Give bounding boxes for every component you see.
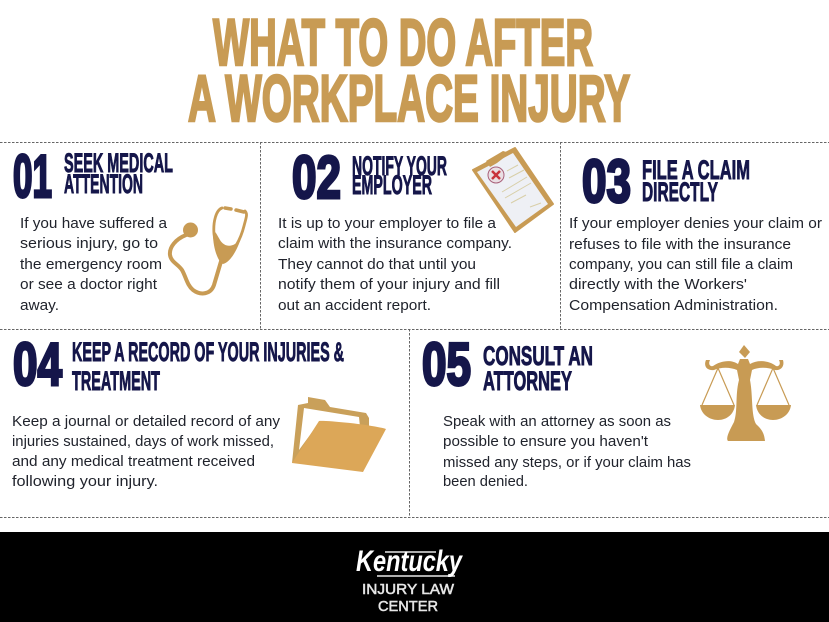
heading: notify your employer: EMPLOYER xyxy=(352,170,432,200)
heading: seek medical attention xyxy=(64,148,173,199)
step number 04: 04 xyxy=(13,331,62,398)
body text: Speak with an attorney as soon as xyxy=(443,413,671,430)
step number 01: 01 xyxy=(13,143,52,210)
icon: clipboard xyxy=(473,148,553,232)
panel: step 2 notify your employer xyxy=(278,144,553,314)
title xyxy=(188,5,630,135)
body text: been denied. xyxy=(443,473,528,490)
body text xyxy=(443,413,691,490)
heading: keep a record of your injuries and treatment xyxy=(72,337,344,396)
body text xyxy=(278,215,512,314)
logo: Kentucky Injury Law Center xyxy=(356,545,463,615)
heading: file a claim directly xyxy=(642,155,750,207)
heading: file a claim directly: FILE A CLAIM xyxy=(642,155,750,185)
body text: Compensation Administration. xyxy=(569,297,778,314)
body text: Keep a journal or detailed record of any xyxy=(12,413,281,430)
panel: step 5 consult an attorney xyxy=(422,331,791,490)
icon: folder xyxy=(292,397,386,472)
body text: out an accident report. xyxy=(278,297,431,314)
heading: keep a record of your injuries and treatment: TREATMENT xyxy=(72,366,160,396)
panel: step 1 seek medical attention xyxy=(13,143,247,314)
body text: directly with the Workers' xyxy=(569,276,747,293)
body text: missed any steps, or if your claim has xyxy=(443,454,691,471)
footer band with logo xyxy=(0,532,829,622)
heading: notify your employer: NOTIFY YOUR xyxy=(352,151,447,181)
body text: refuses to file with the insurance xyxy=(569,236,791,253)
body text: away. xyxy=(20,297,59,314)
body text: injuries sustained, days of work missed, xyxy=(12,433,274,450)
icon: scales of justice xyxy=(700,345,791,441)
heading: consult an attorney: CONSULT AN xyxy=(483,341,593,371)
logo: Kentucky Injury Law Center: Kentucky xyxy=(356,545,463,578)
panel: step 4 keep a record xyxy=(12,331,386,490)
body text: serious injury, go to xyxy=(20,235,158,252)
heading: notify your employer xyxy=(352,151,447,200)
heading: seek medical attention: SEEK MEDICAL xyxy=(64,148,173,178)
body text xyxy=(12,413,281,490)
body text: the emergency room xyxy=(20,256,162,273)
body text: If your employer denies your claim or xyxy=(569,215,822,232)
body text: and any medical treatment received xyxy=(12,453,255,470)
body text: notify them of your injury and fill xyxy=(278,276,500,293)
body text: following your injury. xyxy=(12,473,158,490)
body text: company, you can still file a claim xyxy=(569,256,793,273)
body text: They cannot do that until you xyxy=(278,256,476,273)
heading: keep a record of your injuries and treatment: KEEP A RECORD OF YOUR INJURIES & xyxy=(72,337,344,367)
logo: Kentucky Injury Law Center: INJURY LAW xyxy=(362,582,454,598)
body text: possible to ensure you haven't xyxy=(443,433,649,450)
body text: claim with the insurance company. xyxy=(278,235,512,252)
step number 02: 02 xyxy=(292,144,341,211)
step number 03: 03 xyxy=(582,148,631,215)
body text: It is up to your employer to file a xyxy=(278,215,497,232)
heading: consult an attorney xyxy=(483,341,593,396)
logo: Kentucky Injury Law Center: CENTER xyxy=(378,599,438,615)
panel: step 3 file a claim directly xyxy=(569,148,822,314)
body text: If you have suffered a xyxy=(20,215,168,232)
heading: consult an attorney: ATTORNEY xyxy=(483,366,572,396)
heading: seek medical attention: ATTENTION xyxy=(64,169,143,199)
body text: or see a doctor right xyxy=(20,276,158,293)
heading: file a claim directly: DIRECTLY xyxy=(642,177,718,207)
step number 05: 05 xyxy=(422,331,471,398)
body text xyxy=(20,215,168,314)
body text xyxy=(569,215,822,314)
icon: stethoscope xyxy=(170,208,247,293)
